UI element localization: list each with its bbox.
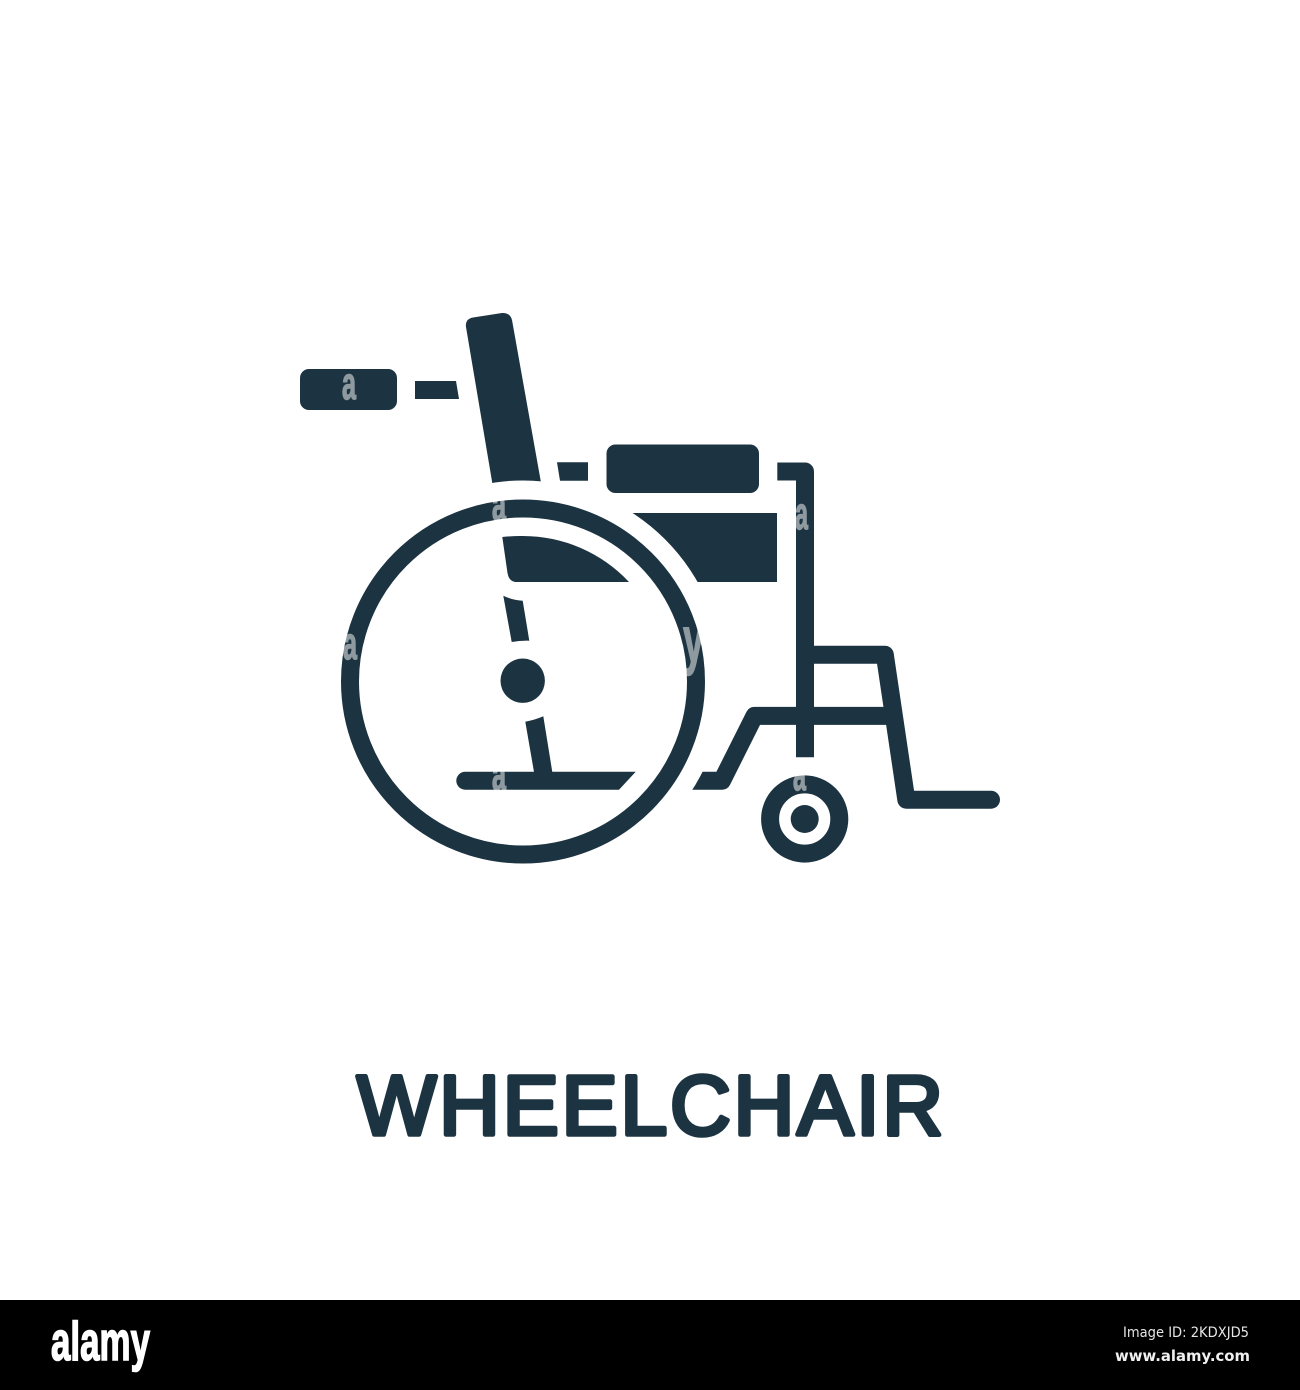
watermark letters: y — [683, 603, 704, 676]
armrest connector — [557, 462, 588, 481]
armrest pad — [606, 444, 759, 493]
watermark letters: a — [793, 749, 807, 800]
backrest — [466, 313, 545, 505]
large wheel rim — [350, 508, 696, 854]
icon: wheelchair — [300, 313, 991, 882]
push handle bar — [415, 381, 459, 399]
seat side inside wheel — [502, 536, 629, 582]
watermark letters — [342, 358, 809, 800]
caster wheel — [770, 784, 839, 854]
image id: Image ID: 2KDXJD5 — [1123, 1325, 1249, 1341]
watermark letters: a — [492, 749, 507, 800]
lower frame — [680, 716, 892, 781]
upper strut — [503, 596, 529, 642]
watermark letters: a — [492, 479, 507, 530]
wheel clearance gap — [322, 480, 724, 882]
lower strut — [525, 716, 552, 772]
wheel hub — [500, 658, 545, 703]
lower bar inside wheel — [456, 772, 636, 790]
watermark letters: a — [342, 358, 357, 409]
website: www.alamy.com — [1115, 1347, 1250, 1365]
footer bar — [0, 1300, 1300, 1390]
seat panel — [620, 513, 777, 582]
footrest leg — [810, 655, 991, 800]
title: WHEELCHAIR — [357, 1059, 943, 1153]
front frame upright — [777, 472, 805, 757]
push handle grip — [300, 369, 397, 410]
watermark letters: a — [343, 618, 358, 669]
watermark letters: a — [795, 488, 809, 539]
footer logo: alamy — [51, 1310, 150, 1372]
